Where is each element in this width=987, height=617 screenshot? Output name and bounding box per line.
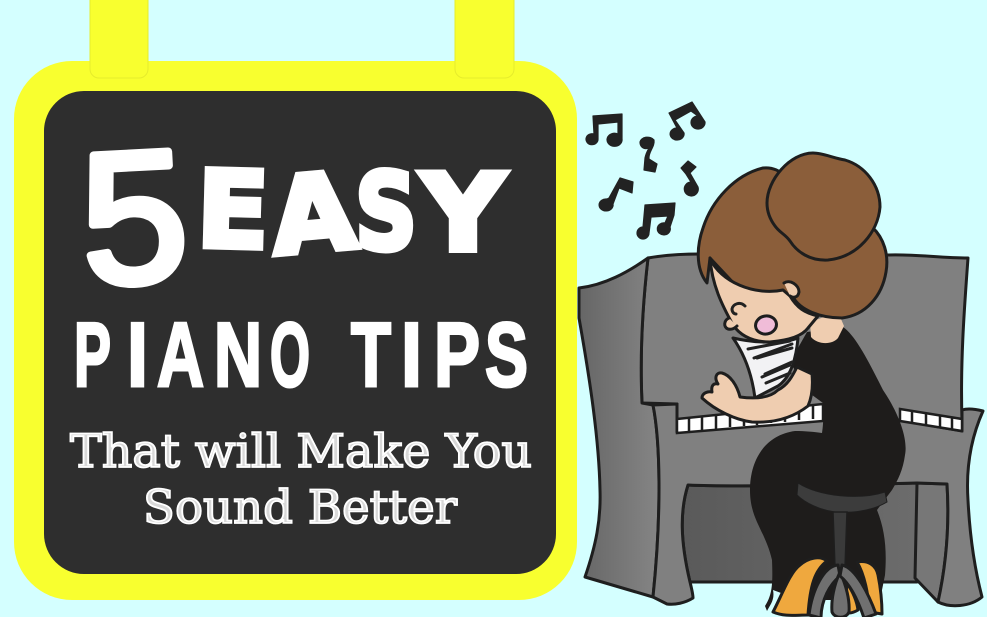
title: EASY: E xyxy=(195,148,271,273)
chalkboard panel xyxy=(44,91,556,574)
piano: lower right side xyxy=(915,483,948,602)
pianist: nose xyxy=(725,318,737,329)
shoes xyxy=(773,558,882,615)
title: big 5: 5 xyxy=(76,110,193,325)
pianist: hair back xyxy=(698,168,887,318)
title: PIANO TIPS: I xyxy=(127,305,148,406)
title: PIANO TIPS: T xyxy=(351,305,391,406)
yellow sign frame xyxy=(14,61,577,600)
pianist: sheet music xyxy=(733,338,798,398)
pianist: neck xyxy=(810,312,844,343)
title: EASY: S xyxy=(355,151,417,274)
title: EASY xyxy=(195,148,506,279)
sign hanger straps xyxy=(90,0,514,78)
pianist: face xyxy=(710,258,818,342)
pianist: arm and hand xyxy=(702,367,812,422)
piano stool xyxy=(797,483,887,617)
music notes xyxy=(586,102,705,239)
piano: front body and legs xyxy=(653,404,983,606)
upright piano xyxy=(579,254,983,606)
title: EASY: Y xyxy=(419,152,506,275)
title: PIANO TIPS: A xyxy=(157,305,204,406)
title: PIANO TIPS xyxy=(74,305,528,406)
title: PIANO TIPS: N xyxy=(214,305,262,406)
piano: upper front panel xyxy=(641,254,968,440)
pianist: hair bun xyxy=(767,153,880,260)
piano: keyboard xyxy=(677,404,962,433)
piano: lower recess xyxy=(682,483,917,582)
title: EASY: A xyxy=(266,149,361,279)
pianist: ear xyxy=(784,282,799,297)
subtitle line 1: That will Make You xyxy=(70,424,532,478)
title: PIANO TIPS: O xyxy=(270,305,310,406)
pianist: black dress xyxy=(750,327,906,611)
pianist xyxy=(698,153,906,611)
title: PIANO TIPS: S xyxy=(485,305,528,406)
piano: left side panel xyxy=(579,258,659,597)
pianist: closed eye xyxy=(732,303,745,314)
stool: seat xyxy=(797,483,887,512)
title: PIANO TIPS: I xyxy=(401,305,422,406)
pianist: open mouth xyxy=(754,314,778,336)
title: PIANO TIPS: P xyxy=(434,305,480,406)
stool: pole xyxy=(833,512,847,568)
title: PIANO TIPS: P xyxy=(74,305,111,406)
stool: base legs xyxy=(809,565,876,617)
subtitle line 2: Sound Better xyxy=(143,480,457,534)
